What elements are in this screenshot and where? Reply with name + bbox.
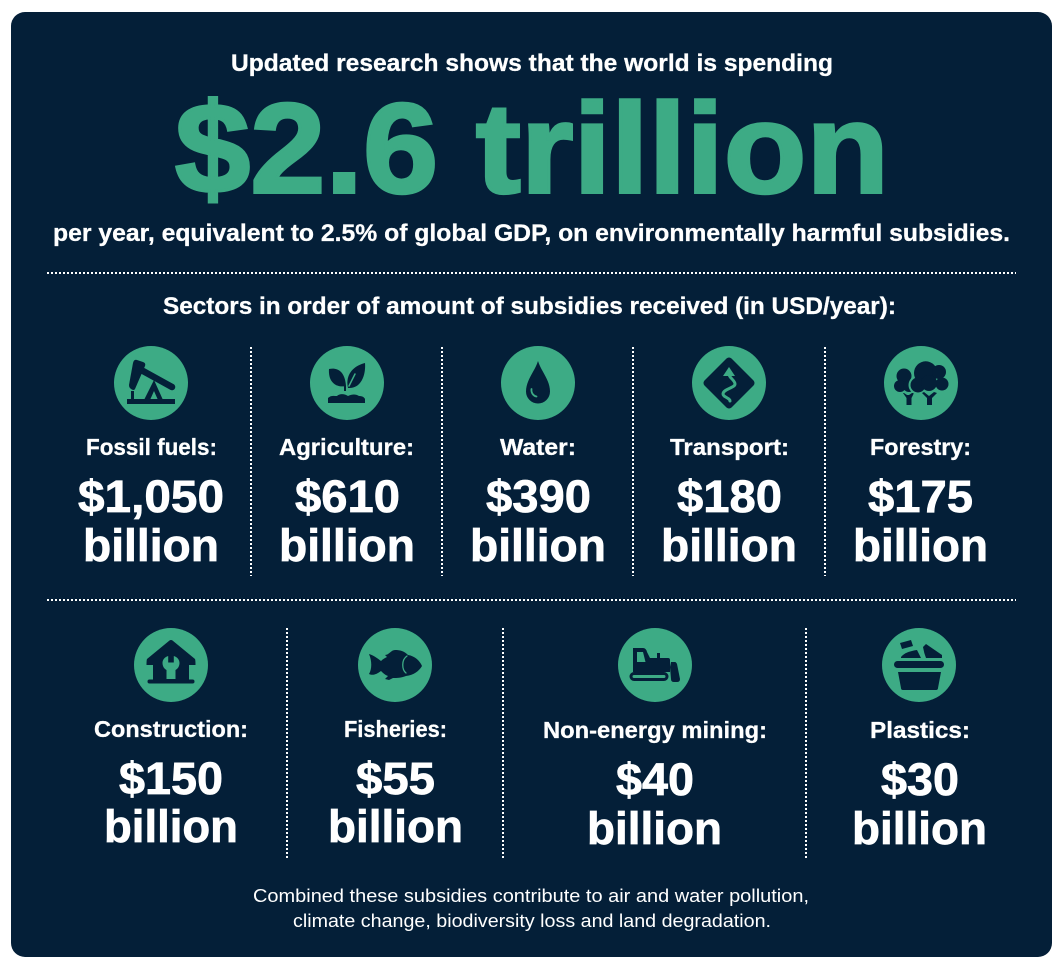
- icon: bulldozer: [618, 628, 692, 702]
- icon: trees: [884, 346, 958, 420]
- sector: transport: [661, 346, 797, 571]
- label: Fisheries:: [344, 716, 447, 742]
- label: Construction:: [94, 716, 248, 742]
- unit: billion: [279, 520, 415, 571]
- icon: winding road sign: [692, 346, 766, 420]
- icon: oil pump: [114, 346, 188, 420]
- label: Plastics:: [870, 717, 970, 743]
- value: $30: [881, 754, 959, 805]
- sector: non-energy mining: [543, 628, 767, 854]
- section heading: Sectors in order of amount of subsidies received (in USD/year):: [163, 293, 896, 320]
- unit: billion: [83, 520, 219, 571]
- value: $55: [356, 753, 435, 804]
- unit: billion: [661, 520, 797, 571]
- unit: billion: [587, 803, 722, 854]
- footer text: Combined these subsidies contribute to air and water pollution,: [253, 885, 809, 906]
- unit: billion: [328, 801, 463, 852]
- label: Non-energy mining:: [543, 717, 767, 743]
- icon: fish: [358, 628, 432, 702]
- unit: billion: [852, 803, 987, 854]
- icon: house with wrench: [134, 628, 208, 702]
- label: Forestry:: [870, 434, 971, 460]
- sector: fisheries: [328, 628, 463, 852]
- value: $175: [868, 471, 973, 522]
- sector: forestry: [853, 346, 988, 571]
- value: $40: [616, 754, 694, 805]
- footer text: [253, 885, 809, 931]
- value: $150: [119, 753, 223, 804]
- sector: fossil fuels: [78, 346, 224, 571]
- unit: billion: [853, 520, 988, 571]
- icon: water drop: [501, 346, 575, 420]
- label: Agriculture:: [279, 434, 414, 460]
- label: Fossil fuels:: [86, 434, 217, 460]
- sector: agriculture: [279, 346, 415, 571]
- icon: basket of plastic waste: [882, 628, 956, 702]
- footer text: climate change, biodiversity loss and land degradation.: [293, 910, 771, 931]
- value: $390: [486, 471, 591, 522]
- unit: billion: [470, 520, 606, 571]
- icon: seedling: [310, 346, 384, 420]
- value: $610: [295, 471, 400, 522]
- sector: plastics: [852, 628, 987, 854]
- sector: water: [470, 346, 606, 571]
- subhead: per year, equivalent to 2.5% of global GDP, on environmentally harmful subsidies.: [53, 220, 1010, 247]
- intro line: Updated research shows that the world is spending: [231, 50, 833, 77]
- label: Transport:: [670, 434, 789, 460]
- headline figure: $2.6 trillion: [175, 78, 889, 220]
- value: $1,050: [78, 471, 224, 522]
- label: Water:: [500, 434, 576, 460]
- value: $180: [677, 471, 782, 522]
- unit: billion: [104, 801, 238, 852]
- sector: construction: [94, 628, 248, 852]
